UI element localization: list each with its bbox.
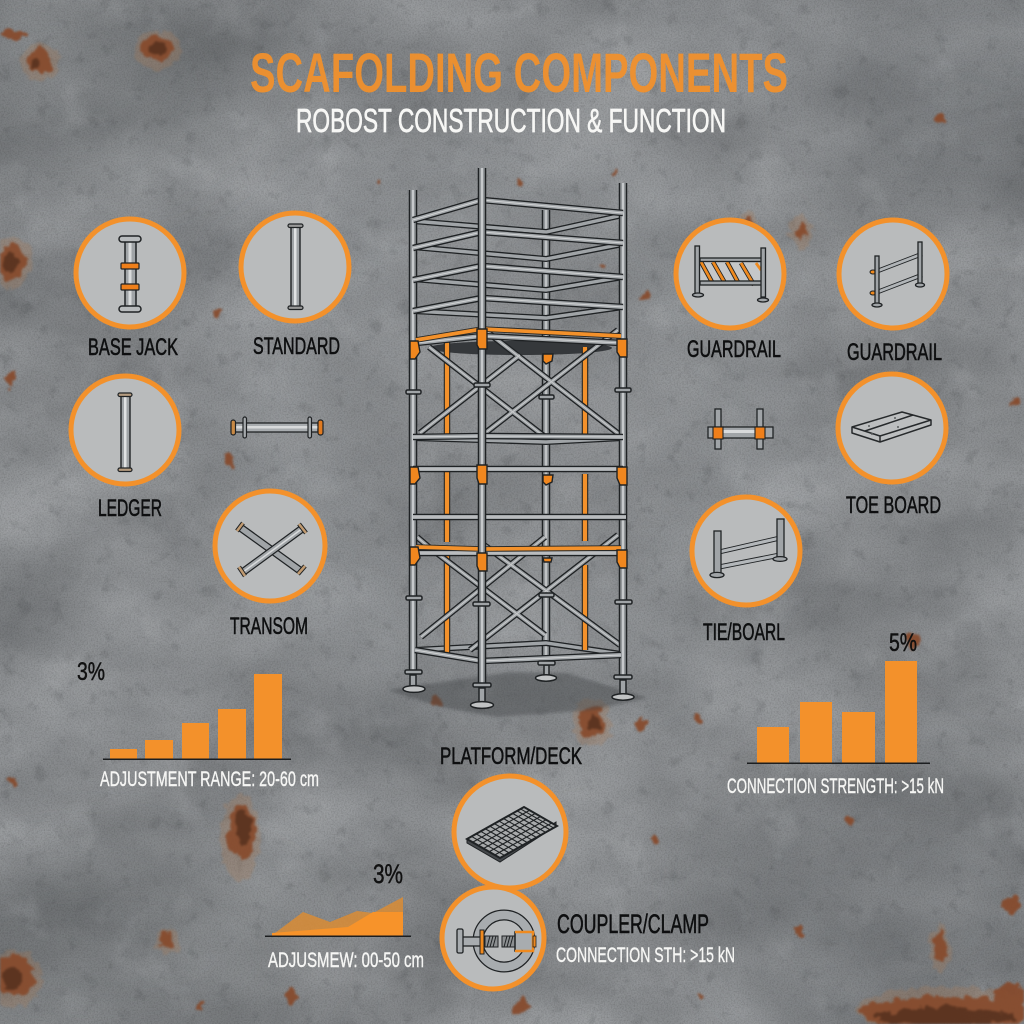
orange vertical posts xyxy=(447,340,585,656)
panel: guardrail xyxy=(839,220,947,366)
cross braces xyxy=(417,328,620,650)
label: PLATFORM/DECK xyxy=(440,743,582,770)
panel: transom xyxy=(215,491,325,640)
orange couplers xyxy=(410,329,627,571)
label: LEDGER xyxy=(98,495,162,522)
value: 3% xyxy=(373,859,403,889)
icon: guardrail frame xyxy=(839,220,947,328)
icon: connector with orange clamps xyxy=(708,409,773,449)
icon: standard xyxy=(241,213,349,321)
rails back xyxy=(413,215,623,654)
bar chart: connection strength xyxy=(727,629,944,798)
panel: ledger xyxy=(71,376,179,522)
panel: coupler clamp xyxy=(442,887,735,989)
orange platform rails xyxy=(416,329,621,549)
central scaffold tower illustration xyxy=(388,168,648,717)
icon: coupler xyxy=(442,887,544,989)
subtitle: ROBOST CONSTRUCTION & FUNCTION xyxy=(296,102,726,139)
panel: guardrail with hazard panel xyxy=(676,220,784,363)
caption: CONNECTION STH: >15 kN xyxy=(556,944,735,967)
icon: hazard guardrail xyxy=(676,220,784,328)
ground shadow xyxy=(388,672,648,717)
collars and foot stems xyxy=(403,383,634,708)
panel: standard xyxy=(241,213,349,360)
icon: transom xyxy=(215,491,325,601)
garbled label: TIE/BOARL xyxy=(703,619,785,646)
bars xyxy=(757,661,917,763)
label: TOE BOARD xyxy=(846,492,941,519)
horizontal ledgers xyxy=(413,200,626,661)
caption: ADJUSTMENT RANGE: 20-60 cm xyxy=(100,768,319,791)
icon: ledger xyxy=(71,376,179,484)
label: COUPLER/CLAMP xyxy=(557,909,709,939)
deck xyxy=(420,341,616,556)
value: 3% xyxy=(77,658,105,686)
value: 5% xyxy=(889,629,917,657)
icon: toe board xyxy=(838,374,946,482)
panel: base jack xyxy=(76,219,184,361)
front standard xyxy=(481,168,483,685)
bars xyxy=(110,674,282,759)
caption: ADJUSMEW: 00-50 cm xyxy=(268,949,424,972)
areas xyxy=(272,897,403,936)
icon: base jack xyxy=(76,219,184,327)
panel: toe board xyxy=(838,374,946,519)
title: SCAFOLDING COMPONENTS xyxy=(250,41,788,104)
icon: tie frame xyxy=(692,497,800,605)
bar chart: adjustment range xyxy=(77,658,319,791)
back standard xyxy=(545,210,547,663)
side standards xyxy=(413,183,623,677)
area chart: adjustment xyxy=(265,859,424,972)
label: BASE JACK xyxy=(88,334,178,361)
label: TRANSOM xyxy=(230,613,308,640)
label: GUARDRAIL xyxy=(687,336,781,363)
label: GUARDRAIL xyxy=(847,339,942,366)
panel: tie xyxy=(692,497,800,646)
panel: platform deck xyxy=(440,743,582,888)
icon: horizontal tube with end fittings xyxy=(231,417,323,438)
icon: deck grating xyxy=(454,776,566,888)
label: STANDARD xyxy=(253,333,340,360)
